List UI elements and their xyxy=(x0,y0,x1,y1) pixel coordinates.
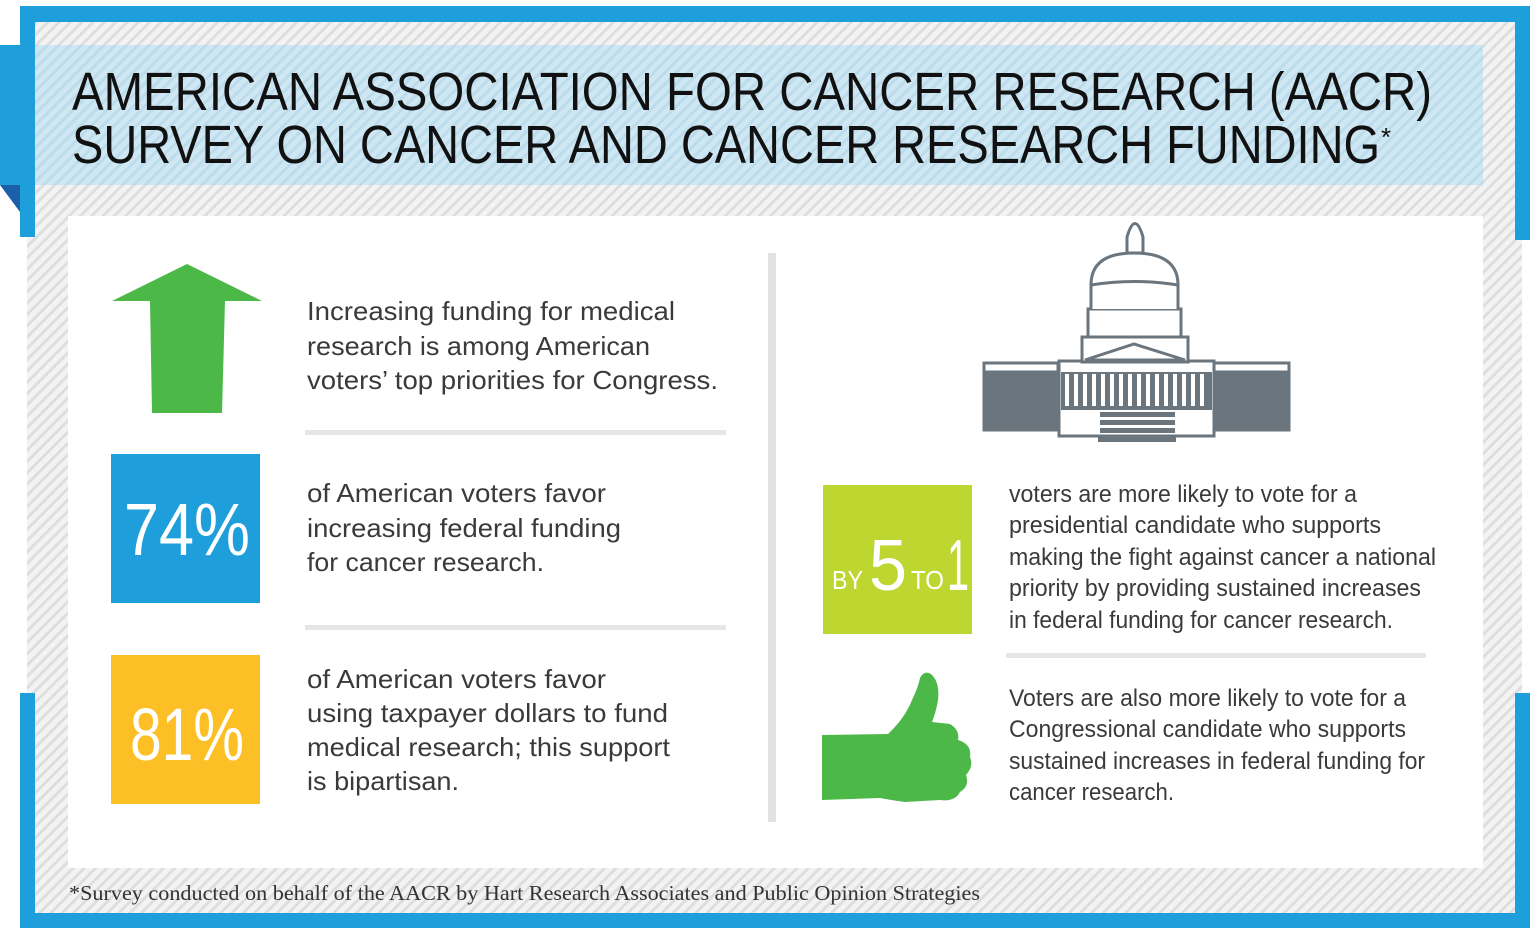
text block: priorities: voters’ top priorities for Congress. xyxy=(307,365,718,395)
text block: 81%: of American voters favor xyxy=(307,664,606,694)
flag fold xyxy=(0,185,20,212)
stat box 74% xyxy=(111,454,260,603)
text block: 74%: increasing federal funding xyxy=(307,513,621,543)
stat box 81% xyxy=(111,655,260,804)
title band xyxy=(35,45,1483,185)
white panel xyxy=(68,216,1483,868)
text block: 74%: for cancer research. xyxy=(307,547,544,577)
text block: congressional: Congressional candidate who supports xyxy=(1009,716,1406,743)
icon: thumbs up xyxy=(822,673,971,802)
text block: priorities: research is among American xyxy=(307,331,650,361)
stat box by 5 to 1: BY xyxy=(832,565,863,595)
text block: 5 to 1: priority by providing sustained increases xyxy=(1009,575,1421,602)
text block: priorities: Increasing funding for medical xyxy=(307,296,675,326)
stat box by 5 to 1: 1 xyxy=(947,526,969,606)
text block: 81% xyxy=(307,664,671,796)
title: * xyxy=(1381,122,1391,152)
text block: 74%: of American voters favor xyxy=(307,478,606,508)
title xyxy=(72,62,1432,175)
text block: 5 to 1: making the fight against cancer a national xyxy=(1009,544,1436,571)
stat box 74%: 74% xyxy=(124,488,250,571)
text block: 5 to 1: voters are more likely to vote for a xyxy=(1009,481,1358,508)
icon: capitol xyxy=(984,224,1289,442)
text block: 81%: medical research; this support xyxy=(307,732,671,762)
stat box by 5 to 1: 5 xyxy=(869,526,907,606)
text block: priorities xyxy=(307,296,718,395)
footnote: *Survey conducted on behalf of the AACR by Hart Research Associates and Public Opinion Strategies xyxy=(69,881,980,905)
text block: congressional: sustained increases in federal funding for xyxy=(1009,748,1425,775)
text block: congressional xyxy=(1009,685,1425,806)
vertical divider xyxy=(768,253,776,822)
text block: 81%: using taxpayer dollars to fund xyxy=(307,698,668,728)
text block: congressional: Voters are also more likely to vote for a xyxy=(1009,685,1407,712)
icon: up arrow xyxy=(112,264,262,413)
text block: 74% xyxy=(307,478,621,577)
text block: 5 to 1 xyxy=(1009,481,1436,634)
stat box by 5 to 1: TO xyxy=(911,565,944,595)
stat box 81%: 81% xyxy=(130,693,244,776)
text block: 81%: is bipartisan. xyxy=(307,766,459,796)
text block: 5 to 1: presidential candidate who supports xyxy=(1009,512,1381,539)
title: SURVEY ON CANCER AND CANCER RESEARCH FUNDING xyxy=(72,115,1380,175)
text block: congressional: cancer research. xyxy=(1009,779,1174,806)
stat box by 5 to 1 xyxy=(823,485,972,634)
text block: 5 to 1: in federal funding for cancer research. xyxy=(1009,607,1393,634)
